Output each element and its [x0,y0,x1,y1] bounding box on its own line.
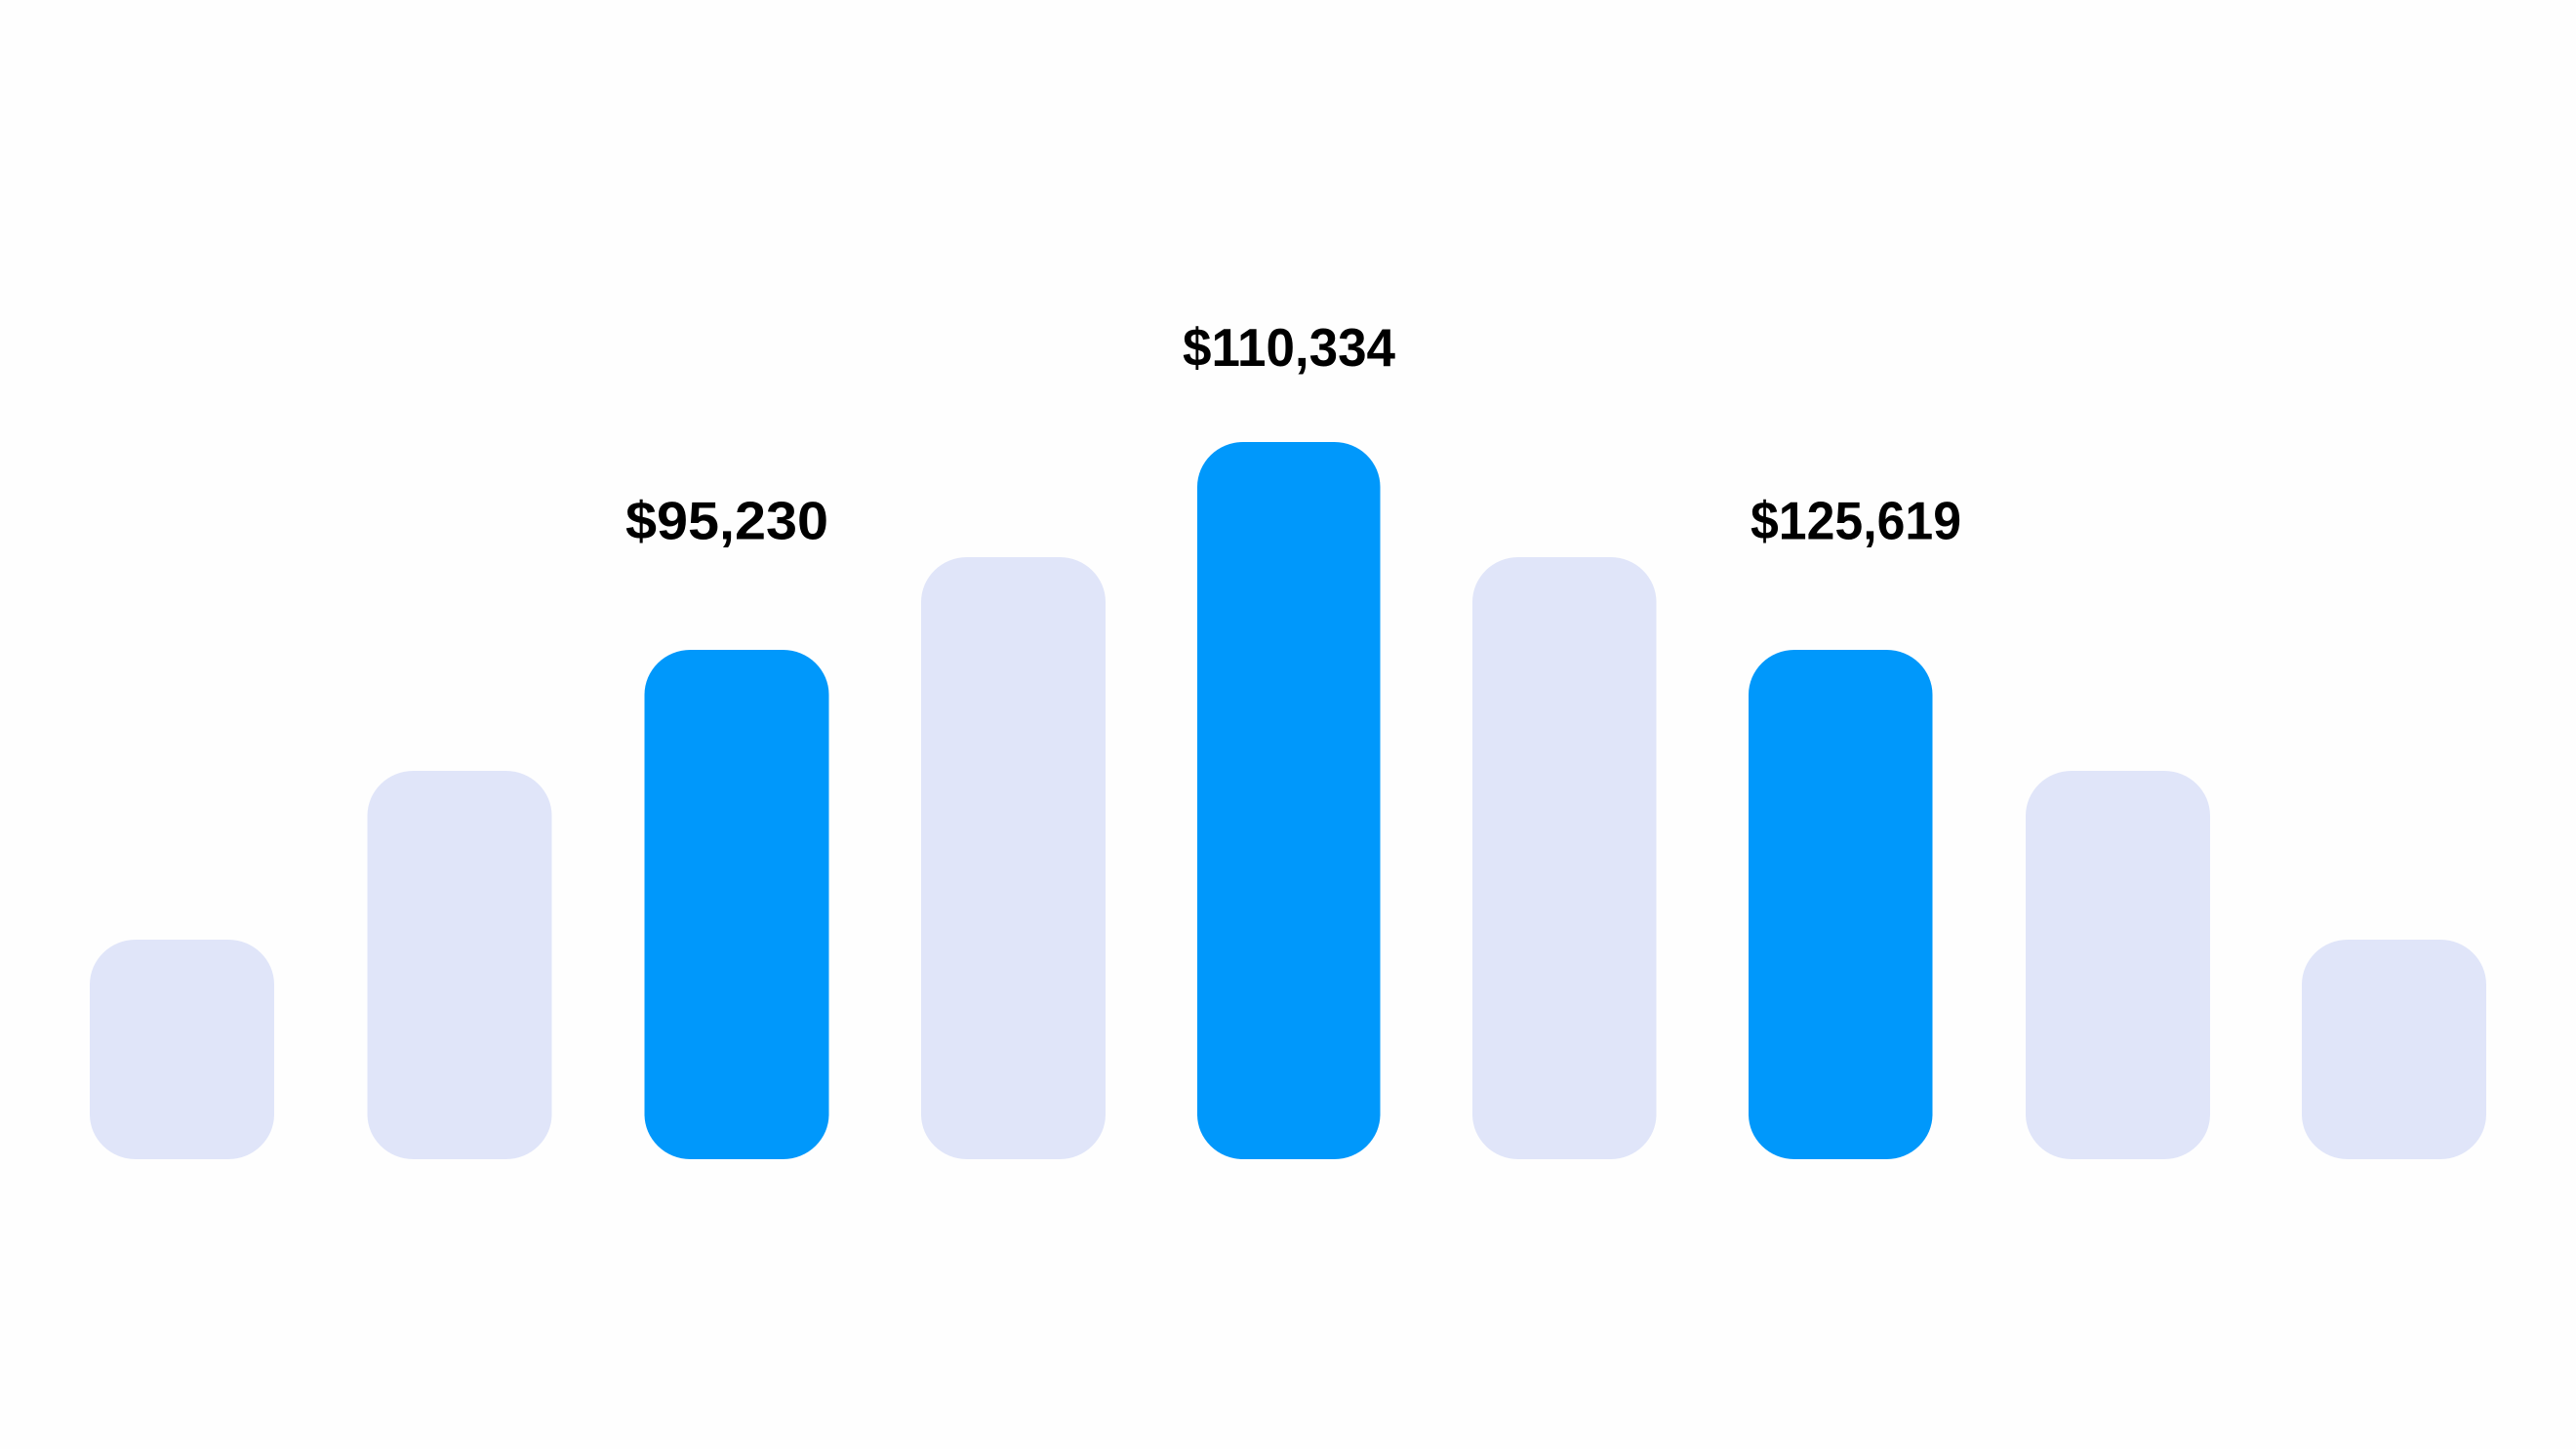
bar 6 [1472,557,1657,1159]
bar 7 highlighted [1749,650,1932,1159]
bar 2 [367,771,552,1159]
bar 5 highlighted [1197,442,1380,1159]
bar 1 [90,940,274,1159]
value label: $110,334: $110,334 [1183,317,1395,378]
bars [90,442,2486,1159]
value label: $95,230: $95,230 [625,490,828,550]
bar 4 [921,557,1106,1159]
value label: $125,619: $125,619 [1751,490,1961,550]
bar 8 [2026,771,2210,1159]
bar 3 highlighted [644,650,829,1159]
bar 9 [2302,940,2486,1159]
